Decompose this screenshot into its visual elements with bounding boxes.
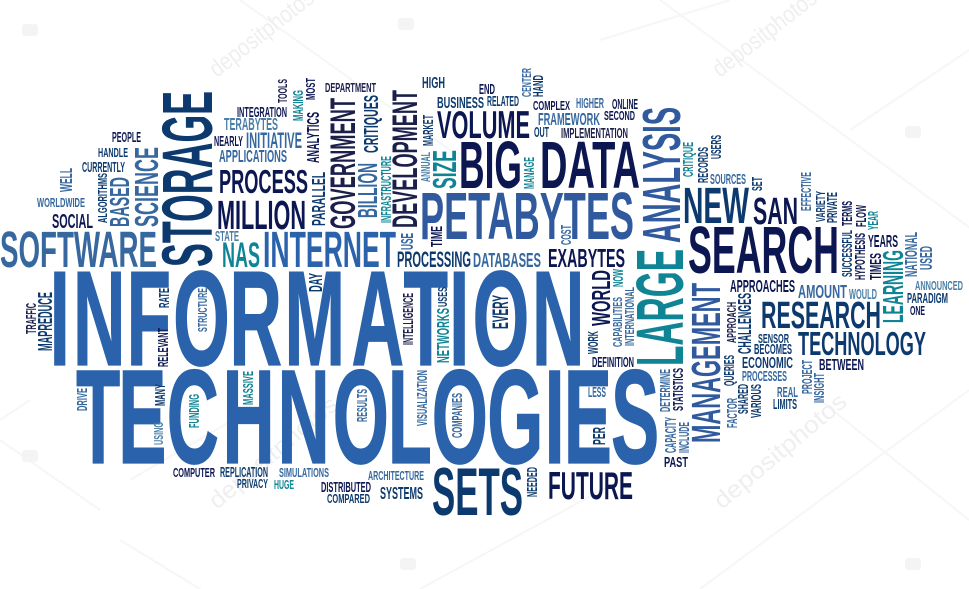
watermark layer: depositphotos bbox=[709, 388, 852, 515]
word: HAND: HAND bbox=[531, 75, 547, 97]
word: SETS: SETS bbox=[432, 454, 523, 530]
word cloud infographic: BILLION bbox=[352, 163, 383, 218]
word: PROCESSES: PROCESSES bbox=[742, 369, 787, 385]
word: MAKING: MAKING bbox=[291, 90, 307, 121]
word: WOULD: WOULD bbox=[849, 287, 877, 303]
word: APPROACHES: APPROACHES bbox=[730, 276, 795, 296]
word: LARGE: LARGE bbox=[624, 249, 698, 366]
word: NEARLY: NEARLY bbox=[214, 134, 243, 150]
word: MANY: MANY bbox=[153, 384, 169, 406]
word: DEPARTMENT: DEPARTMENT bbox=[325, 80, 376, 95]
word: APPROACH: APPROACH bbox=[724, 302, 739, 343]
word: PROCESS: PROCESS bbox=[219, 164, 308, 201]
word: DATABASES: DATABASES bbox=[473, 250, 541, 272]
word cloud infographic: WELL bbox=[56, 168, 76, 192]
word: PARALLEL: PARALLEL bbox=[309, 172, 330, 226]
word: AMOUNT: AMOUNT bbox=[798, 282, 847, 303]
word cloud infographic: PEOPLE bbox=[112, 130, 141, 146]
word: END: END bbox=[479, 82, 495, 98]
word: CRITIQUES: CRITIQUES bbox=[361, 95, 383, 153]
word cloud infographic: SHARED bbox=[736, 384, 752, 414]
word: INFRASTRUCTURE: INFRASTRUCTURE bbox=[379, 156, 395, 223]
word cloud infographic: USERS bbox=[709, 135, 725, 159]
word: BASED: BASED bbox=[104, 177, 135, 227]
word: SIZE: SIZE bbox=[427, 150, 464, 189]
word: COMPARED: COMPARED bbox=[327, 491, 370, 506]
word: MARKET: MARKET bbox=[421, 115, 437, 146]
word: LIMITS: LIMITS bbox=[773, 397, 797, 413]
word: BUSINESS: BUSINESS bbox=[437, 95, 484, 112]
word cloud infographic: COST bbox=[559, 225, 575, 245]
word: INTEGRATION: INTEGRATION bbox=[237, 105, 287, 121]
word: ECONOMIC: ECONOMIC bbox=[742, 355, 793, 372]
word: COMPANIES: COMPANIES bbox=[450, 393, 466, 438]
word: SECOND: SECOND bbox=[604, 108, 635, 123]
word cloud infographic: MANAGE bbox=[522, 157, 538, 189]
word cloud infographic: RECORDS bbox=[696, 147, 712, 183]
word: MASSIVE: MASSIVE bbox=[241, 371, 257, 405]
word: APPLICATIONS: APPLICATIONS bbox=[219, 146, 287, 166]
word: VARIETY: VARIETY bbox=[813, 191, 828, 222]
word: DEFINITION: DEFINITION bbox=[592, 355, 634, 371]
word: DISTRIBUTED: DISTRIBUTED bbox=[321, 480, 371, 496]
word: PRIVACY: PRIVACY bbox=[237, 476, 268, 491]
word cloud infographic: INTELLIGENCE bbox=[401, 293, 417, 345]
word: RELEVANT: RELEVANT bbox=[156, 328, 172, 367]
word: ANALYTICS: ANALYTICS bbox=[303, 112, 323, 163]
word cloud infographic: YEAR bbox=[866, 211, 882, 230]
word: VARIOUS: VARIOUS bbox=[749, 384, 765, 418]
word cloud infographic: SUCCESSFUL bbox=[840, 230, 856, 277]
word: BECOMES: BECOMES bbox=[754, 342, 792, 358]
word: HYPOTHESIS: HYPOTHESIS bbox=[853, 233, 869, 280]
word: COMPUTER: COMPUTER bbox=[173, 465, 215, 480]
word: INTERNATIONAL: INTERNATIONAL bbox=[622, 287, 637, 346]
word cloud infographic: TERMS bbox=[840, 201, 856, 226]
word: VOLUME: VOLUME bbox=[437, 104, 530, 147]
word: FLOW: FLOW bbox=[854, 205, 870, 227]
word: INTERNET: INTERNET bbox=[263, 221, 396, 278]
word cloud infographic: LEARNING bbox=[878, 250, 910, 323]
word: CRITIQUE: CRITIQUE bbox=[681, 142, 697, 177]
word: ALGORITHMS: ALGORITHMS bbox=[95, 173, 110, 223]
word: NAS: NAS bbox=[222, 236, 260, 275]
word: COMPLEX: COMPLEX bbox=[533, 98, 570, 113]
word: NATIONAL: NATIONAL bbox=[901, 232, 921, 277]
word: ARCHITECTURE: ARCHITECTURE bbox=[368, 468, 424, 483]
word: SOFTWARE: SOFTWARE bbox=[0, 221, 157, 278]
watermark layer: depositphotos bbox=[204, 391, 343, 515]
word: STRUCTURE: STRUCTURE bbox=[195, 288, 210, 332]
word: CAPABILITIES: CAPABILITIES bbox=[610, 297, 625, 347]
word: MOST: MOST bbox=[303, 78, 318, 100]
word: MILLION: MILLION bbox=[217, 192, 306, 238]
word: TRAFFIC: TRAFFIC bbox=[24, 303, 40, 334]
word: HIGHER: HIGHER bbox=[576, 96, 604, 112]
word: MANAGEMENT: MANAGEMENT bbox=[683, 283, 729, 443]
word: NETWORKS: NETWORKS bbox=[433, 308, 453, 363]
word: RESEARCH: RESEARCH bbox=[761, 295, 881, 337]
title word: TECHNOLOGIES: TECHNOLOGIES bbox=[76, 342, 659, 492]
word cloud infographic: MAPREDUCE bbox=[35, 292, 57, 351]
word cloud infographic: CURRENTLY bbox=[82, 160, 125, 176]
title word: INFORMATION: INFORMATION bbox=[50, 243, 585, 394]
word cloud infographic: RELATED bbox=[487, 94, 519, 110]
word cloud infographic: OUT bbox=[534, 125, 549, 141]
word: HANDLE: HANDLE bbox=[98, 145, 128, 160]
word: RATE: RATE bbox=[157, 288, 173, 308]
word: YEARS: YEARS bbox=[868, 231, 898, 251]
word: STATE: STATE bbox=[215, 229, 239, 245]
word: TIMES: TIMES bbox=[868, 253, 885, 280]
word: STATISTICS: STATISTICS bbox=[671, 368, 687, 411]
word cloud infographic: LESS bbox=[588, 385, 606, 401]
word: FACTOR: FACTOR bbox=[725, 398, 741, 428]
word: SENSOR: SENSOR bbox=[758, 331, 789, 346]
word: NOW: NOW bbox=[611, 269, 627, 287]
word: DRIVE: DRIVE bbox=[75, 388, 91, 411]
word: SYSTEMS: SYSTEMS bbox=[380, 483, 423, 503]
word: DETERMINE: DETERMINE bbox=[658, 369, 674, 412]
word: SIMULATIONS: SIMULATIONS bbox=[279, 465, 329, 480]
word: TIME: TIME bbox=[429, 226, 446, 247]
word: SEARCH: SEARCH bbox=[688, 214, 839, 288]
word: FUTURE: FUTURE bbox=[548, 465, 633, 508]
word: FRAMEWORK: FRAMEWORK bbox=[538, 109, 600, 129]
word cloud infographic: REPLICATION bbox=[220, 465, 268, 481]
word: SOURCES: SOURCES bbox=[710, 172, 746, 188]
word: IMPLEMENTATION: IMPLEMENTATION bbox=[561, 126, 628, 142]
word: WORLDWIDE: WORLDWIDE bbox=[37, 195, 85, 210]
word: HIGH: HIGH bbox=[422, 75, 445, 92]
word cloud infographic: PROJECT bbox=[800, 360, 816, 394]
word cloud infographic: INCLUDE bbox=[677, 422, 693, 453]
word: BIG: BIG bbox=[459, 129, 522, 203]
word: INSIGHT: INSIGHT bbox=[812, 373, 828, 403]
word: DATA: DATA bbox=[540, 129, 640, 203]
word: WORK: WORK bbox=[586, 331, 602, 354]
word: TOOLS: TOOLS bbox=[275, 79, 290, 103]
word cloud infographic: SET bbox=[750, 177, 766, 191]
word cloud infographic: ONLINE bbox=[612, 97, 638, 113]
word: PROCESSING: PROCESSING bbox=[397, 247, 471, 272]
word: SOCIAL: SOCIAL bbox=[52, 211, 93, 233]
word cloud infographic: RESULTS bbox=[355, 389, 371, 422]
word cloud infographic: CHALLENGES bbox=[735, 293, 756, 354]
word: PETABYTES: PETABYTES bbox=[420, 180, 634, 254]
word: ANNUAL: ANNUAL bbox=[418, 152, 433, 182]
word: WORLD: WORLD bbox=[586, 270, 616, 326]
word cloud infographic: USED bbox=[916, 246, 936, 270]
word: INITIATIVE: INITIATIVE bbox=[246, 128, 302, 153]
word: REAL: REAL bbox=[777, 385, 798, 401]
word: CENTER: CENTER bbox=[519, 68, 534, 97]
word: SCIENCE: SCIENCE bbox=[129, 147, 166, 227]
word: PRIVATE: PRIVATE bbox=[825, 192, 841, 223]
word: USING: USING bbox=[151, 422, 166, 445]
word: DAY: DAY bbox=[306, 273, 327, 292]
word cloud infographic: EFFECTIVE bbox=[799, 172, 815, 211]
word: BETWEEN: BETWEEN bbox=[819, 357, 864, 374]
word: PAST: PAST bbox=[664, 455, 688, 471]
word: ONE: ONE bbox=[910, 303, 925, 318]
word cloud infographic: USE bbox=[397, 233, 417, 250]
word: USES: USES bbox=[435, 287, 450, 307]
word: NEW: NEW bbox=[683, 177, 749, 234]
word: EXABYTES: EXABYTES bbox=[548, 243, 625, 273]
word: SAN: SAN bbox=[753, 191, 798, 233]
word: FUNDING: FUNDING bbox=[187, 394, 203, 428]
word: TERABYTES: TERABYTES bbox=[224, 114, 278, 134]
word: HUGE: HUGE bbox=[274, 477, 294, 492]
word: VISUALIZATION: VISUALIZATION bbox=[415, 370, 431, 426]
word cloud infographic: EVERY bbox=[488, 295, 513, 329]
word cloud infographic: NEEDED bbox=[525, 467, 541, 497]
word cloud infographic: QUERIES bbox=[722, 355, 738, 386]
word cloud infographic: CAPACITY bbox=[663, 417, 680, 453]
word: PER: PER bbox=[589, 427, 609, 445]
